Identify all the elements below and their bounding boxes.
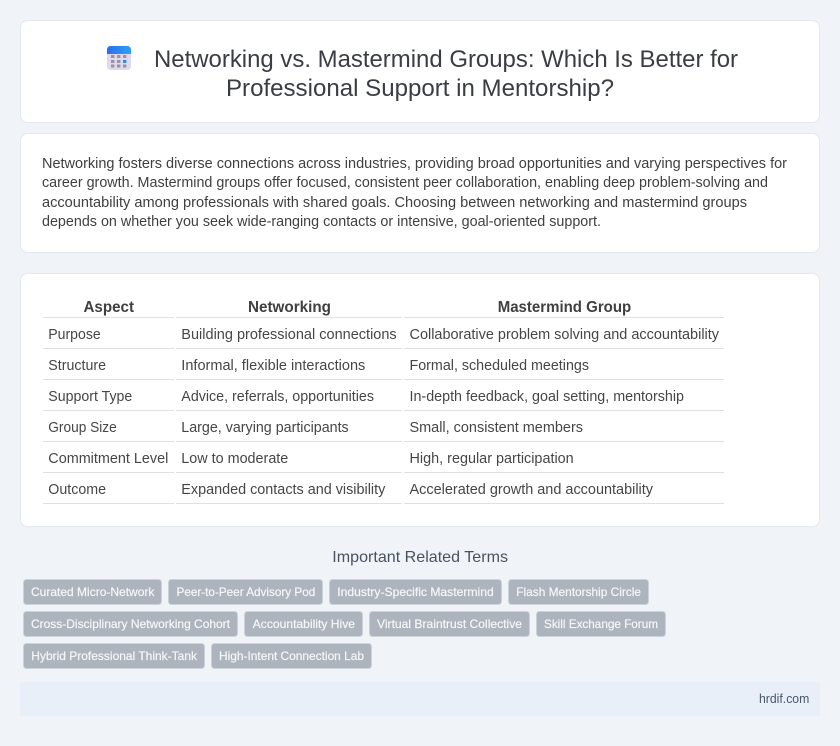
- title: [154, 46, 738, 102]
- row: outcome: Accelerated growth and accountability: [410, 482, 654, 498]
- row: commitment level: [48, 451, 574, 467]
- title: Professional Support in Mentorship?: [226, 75, 614, 102]
- row: structure: Formal, scheduled meetings: [410, 358, 589, 374]
- tag: [212, 644, 372, 668]
- row: group size: Small, consistent members: [410, 420, 583, 436]
- panel: comparison table: [20, 274, 820, 526]
- tag: [24, 580, 162, 604]
- intro paragraph: accountability among professionals with shared goals. Choosing between networking and mastermind groups: [42, 195, 747, 211]
- intro paragraph: career growth. Mastermind groups offer focused, consistent peer collaboration, enabling deep problem-solving and: [42, 175, 768, 191]
- row: purpose: Purpose: [48, 327, 101, 343]
- row: commitment level: Low to moderate: [181, 451, 288, 467]
- tag: Flash Mentorship Circle: [516, 585, 641, 599]
- tag: [244, 612, 362, 636]
- panel: title header: [20, 20, 820, 122]
- row: commitment level: High, regular participation: [410, 451, 574, 467]
- row: group size: [48, 420, 583, 436]
- row: structure: Structure: [48, 358, 106, 374]
- row: structure: Informal, flexible interactions: [181, 358, 365, 374]
- intro paragraph: depends on whether you seek wide-ranging contacts or intensive, goal-oriented support.: [42, 214, 601, 230]
- tag: Hybrid Professional Think-Tank: [31, 649, 198, 663]
- tag: [508, 580, 648, 604]
- row: commitment level: Commitment Level: [48, 451, 168, 467]
- row: support type: Advice, referrals, opportunities: [181, 389, 374, 405]
- table header row: Aspect: [84, 299, 135, 316]
- row: group size: Large, varying participants: [181, 420, 349, 436]
- row: support type: [48, 389, 684, 405]
- tag: [330, 580, 502, 604]
- footer bar: [20, 682, 820, 716]
- heading: related terms: Important Related Terms: [332, 549, 508, 566]
- tag: Virtual Braintrust Collective: [377, 617, 522, 631]
- row: outcome: Outcome: [48, 482, 106, 498]
- row: outcome: [48, 482, 654, 498]
- table header row: Networking: [248, 299, 331, 316]
- related term tags: [24, 580, 666, 668]
- icon: calendar: [107, 46, 131, 70]
- row: structure: [48, 358, 589, 374]
- panel: introduction: [20, 134, 820, 252]
- row: purpose: [48, 327, 720, 343]
- intro paragraph: [42, 156, 787, 230]
- tag: [370, 612, 530, 636]
- tag: [24, 644, 204, 668]
- row: purpose: Collaborative problem solving and accountability: [410, 327, 720, 343]
- table header row: [84, 299, 631, 316]
- tag: Curated Micro-Network: [31, 585, 155, 599]
- tag: High-Intent Connection Lab: [219, 649, 364, 663]
- tag: Peer-to-Peer Advisory Pod: [176, 585, 315, 599]
- intro paragraph: Networking fosters diverse connections across industries, providing broad opportunities and varying perspectives for: [42, 156, 787, 172]
- table header row: Mastermind Group: [498, 299, 631, 316]
- row: outcome: Expanded contacts and visibility: [181, 482, 386, 498]
- tag: [168, 580, 322, 604]
- tag: Skill Exchange Forum: [544, 617, 658, 631]
- row: group size: Group Size: [48, 420, 117, 436]
- row: support type: Support Type: [48, 389, 132, 405]
- tag: Industry-Specific Mastermind: [337, 585, 494, 599]
- tag: Cross-Disciplinary Networking Cohort: [31, 617, 231, 631]
- tag: [536, 612, 666, 636]
- tag: [24, 612, 238, 636]
- row: support type: In-depth feedback, goal setting, mentorship: [410, 389, 684, 405]
- footer source: hrdif.com: [759, 691, 809, 706]
- row: purpose: Building professional connections: [181, 327, 397, 343]
- tag: Accountability Hive: [253, 617, 355, 631]
- title: Networking vs. Mastermind Groups: Which Is Better for: [154, 46, 738, 73]
